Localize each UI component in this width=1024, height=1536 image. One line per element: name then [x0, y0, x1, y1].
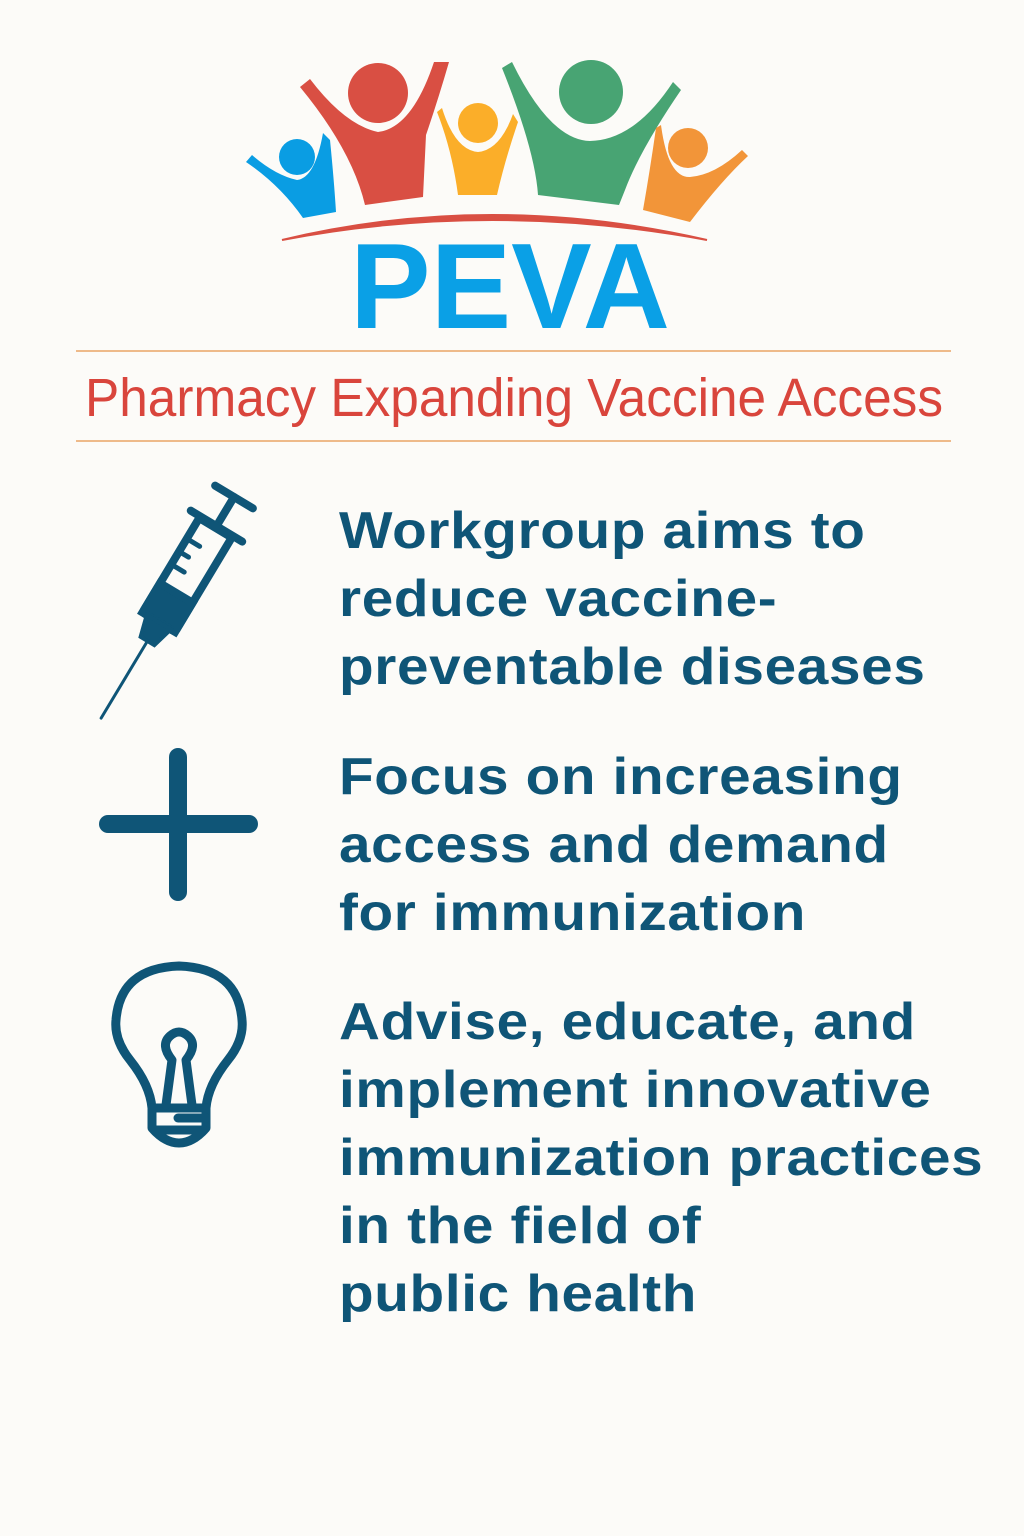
text block: focus [339, 748, 903, 942]
figure: green [502, 60, 681, 205]
logo: PEVA [246, 60, 748, 345]
text block: advise: Advise, educate, and [339, 993, 916, 1051]
text block: advise: in the field of [339, 1197, 701, 1255]
arc [282, 215, 707, 240]
text block: advise [339, 993, 983, 1323]
text block: advise: public health [339, 1265, 697, 1323]
text block: advise: implement innovative [339, 1061, 932, 1119]
figure: yellow [437, 103, 518, 195]
icon: light bulb [111, 962, 247, 1148]
icon: syringe [100, 482, 257, 720]
text block: focus: for immunization [339, 884, 806, 942]
figure: red [300, 62, 449, 205]
text block: workgroup aims: reduce vaccine- [339, 570, 777, 628]
icon: plus [99, 748, 258, 901]
figure: blue [246, 133, 336, 218]
text block: workgroup aims [339, 502, 926, 696]
figure: orange [643, 125, 748, 222]
text block: workgroup aims: preventable diseases [339, 638, 926, 696]
subtitle: Pharmacy Expanding Vaccine Access [85, 368, 943, 428]
text block: advise: immunization practices [339, 1129, 983, 1187]
text block: focus: Focus on increasing [339, 748, 903, 806]
text block: focus: access and demand [339, 816, 889, 874]
text block: workgroup aims: Workgroup aims to [339, 502, 866, 560]
